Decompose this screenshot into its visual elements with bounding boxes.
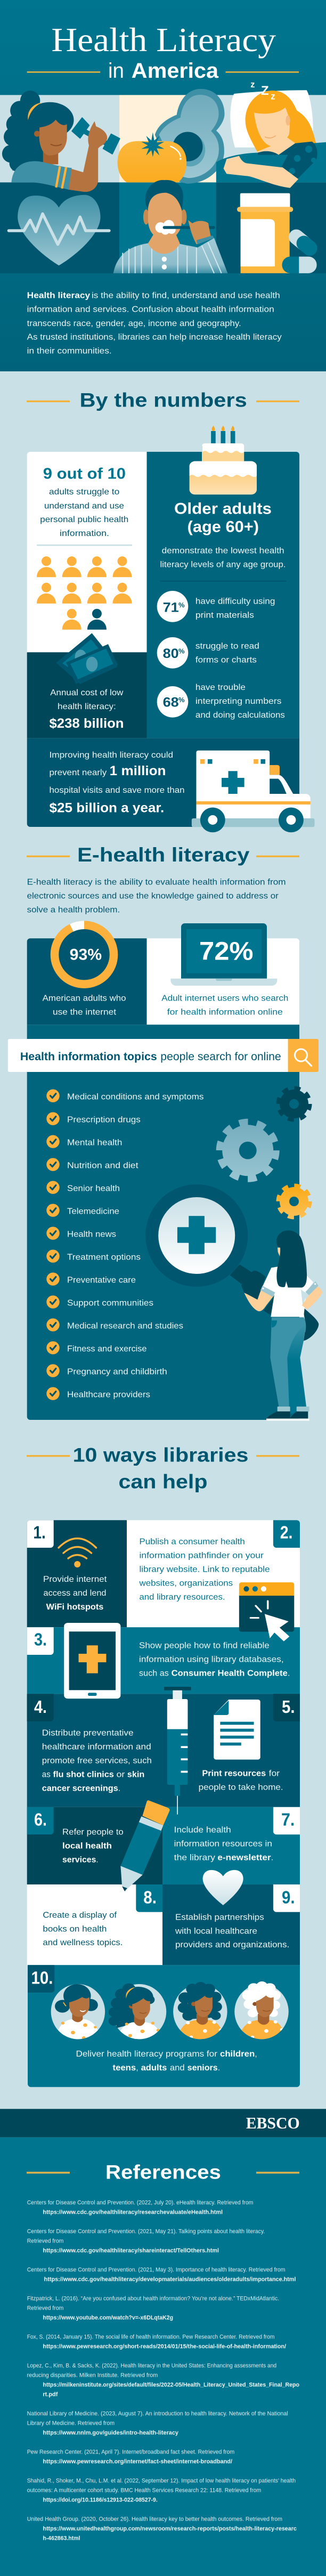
panel: way 2: Publish a consumer health [140, 1537, 245, 1546]
text: reference list: https://www.nnlm.gov/guides/intro-health-literacy [43, 2430, 178, 2436]
icon: pill bottle [237, 193, 317, 273]
panel: way 10: . [218, 2063, 220, 2073]
portrait: teen [109, 1984, 166, 2042]
panel: way 10: Deliver health literacy programs for [76, 2050, 218, 2059]
panel: way 10: , [255, 2050, 257, 2059]
icon: heart [203, 1870, 243, 1905]
stat: 9 out of 10: personal public health [40, 515, 128, 524]
list: health information topics: Support communities [67, 1299, 153, 1308]
text: reference list: https://doi.org/10.1186/s12913-022-08527-9. [43, 2497, 158, 2504]
stat: 68 percent: and doing calculations [195, 711, 285, 720]
heading: references: References [105, 2161, 221, 2183]
panel: way 10: teens [113, 2063, 136, 2073]
heading: e-health literacy [27, 844, 299, 866]
icon: man brushing teeth [113, 180, 227, 273]
panel: way 4: 4. [34, 1697, 47, 1717]
panel: way 10: seniors [188, 2063, 218, 2073]
panel: way 8: books on health [43, 1924, 107, 1933]
panel: way 5: for [269, 1769, 280, 1778]
title: America [132, 59, 219, 83]
icon: avocado [155, 89, 225, 184]
title: in [108, 59, 124, 83]
stat: annual cost: health literacy: [58, 702, 116, 711]
panel: way 2: library website. Link to reputable [140, 1565, 270, 1574]
portrait: child [51, 1984, 105, 2042]
icon: heart with pulse [9, 195, 109, 265]
icon: sleeping woman: z [271, 91, 275, 102]
text: reference list: h-462863.html [43, 2536, 80, 2542]
intro paragraph: is the ability to find, understand and use health [92, 291, 280, 300]
panel: way 1: 1. [33, 1523, 46, 1542]
stat: 9 out of 10: information. [60, 529, 109, 538]
stat: 71 percent: print materials [195, 611, 254, 620]
stat: 9 out of 10 [37, 465, 132, 546]
list: health information topics: Treatment options [67, 1253, 141, 1262]
search bar: Health information topics [20, 1051, 157, 1063]
callout: improving health literacy: 1 million [110, 763, 166, 778]
stat: older adults: demonstrate the lowest health [162, 546, 284, 555]
panel: way 6 [27, 1807, 162, 1884]
icon: dark gear [279, 1088, 309, 1119]
list: health information topics: Medical conditions and symptoms [67, 1093, 203, 1102]
stat: older adults [160, 500, 287, 582]
stat: 68 percent [157, 683, 285, 720]
portrait: senior [234, 1981, 289, 2042]
title [27, 21, 299, 83]
panel: way 9: with local healthcare [175, 1927, 257, 1936]
stat: annual cost [49, 688, 124, 731]
panel: way 8: and wellness topics. [43, 1938, 123, 1947]
intro paragraph: As trusted institutions, libraries can help increase health literacy [27, 332, 282, 342]
text: reference list: https://www.cdc.gov/healthliteracy/researchevaluate/eHealth.html [43, 2209, 223, 2216]
icon: magnifying glass with cross [145, 1184, 248, 1287]
stat: 71 percent: % [178, 601, 185, 609]
callout: improving health literacy [49, 751, 184, 815]
panel: way 8: 8. [143, 1888, 157, 1907]
icon: light gear [221, 1123, 275, 1177]
panel: way 1: WiFi hotspots [46, 1603, 103, 1612]
icon: tomato [118, 132, 186, 182]
stat: 71 percent: 71 [163, 600, 179, 615]
stat: annual cost: Annual cost of low [50, 688, 124, 697]
panel: way 4: . [118, 1784, 120, 1793]
stat: 9 out of 10: adults struggle to [49, 487, 119, 497]
chart: 72 percent laptop [161, 923, 288, 1017]
stat: 80 percent: forms or charts [195, 656, 257, 665]
panel: way 3: 3. [34, 1629, 47, 1649]
list: health information topics: Nutrition and diet [67, 1161, 138, 1171]
hero illustration [0, 80, 326, 273]
text: reference list: https://milkeninstitute.org/sites/default/files/2022-05/Health_Literacy_United_States_Final_Repo [43, 2382, 300, 2388]
text: reference list: Centers for Disease Control and Prevention. (2021, May 3). Importance of health literacy. Retrieved from [27, 2267, 286, 2273]
panel: way 3 [27, 1627, 300, 1694]
panel: way 4: skin [127, 1770, 144, 1779]
text: reference list: Lopez, C., Kim, B. & Sacks, K. (2022). Health literacy in the United States: Enhancing assessments and [27, 2363, 276, 2369]
panel: way 4: or [117, 1770, 125, 1779]
heading: by the numbers: By the numbers [80, 389, 247, 411]
text: reference list: Retrieved from [27, 2238, 64, 2245]
stat: 71 percent [157, 591, 275, 622]
text: reference list: National Library of Medicine. (2023, August 7). An introduction to health literacy. Network of the National [27, 2411, 288, 2417]
stat: older adults: (age 60+) [188, 518, 259, 535]
footer band: EBSCO [246, 2114, 300, 2132]
stat: 68 percent: % [178, 696, 185, 704]
list: health information topics: Medical research and studies [67, 1322, 183, 1331]
intro paragraph: information and services. Confusion about health information [27, 305, 274, 314]
chart: 72 percent laptop: Adult internet users who search [161, 994, 288, 1003]
callout: improving health literacy: prevent nearly [49, 768, 107, 777]
chart: 93 percent ring [43, 925, 126, 1017]
panel: way 5: people to take home. [199, 1783, 283, 1792]
chart: 93 percent ring: American adults who [43, 994, 126, 1003]
stat: older adults: literacy levels of any age group. [160, 560, 286, 569]
icon: birthday cake [190, 426, 257, 494]
intro paragraph: transcends race, gender, age, income and geography. [27, 319, 241, 328]
panel: way 10: , [136, 2063, 138, 2073]
list: health information topics: Health news [67, 1230, 116, 1239]
panel: way 10: adults [141, 2063, 167, 2073]
text: reference list [27, 2200, 300, 2542]
panel: references [0, 2138, 326, 2576]
text: reference list: Fox, S. (2014, January 15). The social life of health information. Pew Research Center. Retrieved from [27, 2334, 275, 2341]
list: health information topics: Prescription drugs [67, 1116, 141, 1125]
panel: way 3: Consumer Health Complete [172, 1669, 288, 1678]
intro paragraph: in their communities. [27, 346, 112, 355]
panel: way 10: 10. [31, 1968, 53, 1987]
panel: way 3: information using library databases, [139, 1655, 284, 1664]
icon: sleeping woman: z [250, 80, 255, 90]
stat: 80 percent: 80 [163, 646, 179, 661]
chart: 93 percent ring: use the internet [53, 1007, 117, 1017]
heading: references [27, 2161, 299, 2183]
text: reference list: https://www.cdc.gov/healthliteracy/developmaterials/audiences/olderadults/importance.html [44, 2277, 296, 2283]
callout: improving health literacy: $25 billion a year. [49, 800, 164, 815]
header band [0, 0, 326, 371]
text: reference list: Shahid, R., Shoker, M., Chu, L.M. et al. (2022, September 12). Impact of low health literacy on patients’ health [27, 2478, 296, 2484]
icon: window with cursor [239, 1582, 294, 1642]
panel: way 4: promote free services, such [42, 1757, 152, 1766]
panel: way 9: Establish partnerships [175, 1913, 264, 1922]
portrait: adult [173, 1982, 227, 2042]
panel: way 3: such as [139, 1669, 169, 1678]
list: health information topics: Telemedicine [67, 1207, 119, 1216]
text: reference list: Centers for Disease Control and Prevention. (2022, July 20). eHealth literacy. Retrieved from [27, 2200, 254, 2206]
stat: 9 out of 10: understand and use [44, 501, 124, 510]
panel: way 4: Distribute preventative [42, 1729, 134, 1738]
panel: way 7: . [271, 1853, 273, 1862]
panel: way 8: Create a display of [43, 1911, 117, 1920]
panel: way 6: Refer people to [62, 1827, 124, 1836]
panel: way 6: local health [62, 1841, 112, 1850]
panel: way 9: 9. [282, 1888, 295, 1907]
chart: 93 percent ring: 93% [70, 946, 102, 964]
panel: way 3: . [288, 1669, 290, 1678]
icon: four portraits [51, 1981, 289, 2042]
list: health information topics [46, 1089, 203, 1400]
panel: way 9 [162, 1884, 300, 1965]
panel: way 8 [27, 1884, 162, 1965]
stat: 80 percent: struggle to read [195, 642, 259, 651]
panel: way 2 [127, 1520, 300, 1627]
panel: way 7: 7. [281, 1810, 295, 1830]
list: health information topics: Senior health [67, 1184, 120, 1193]
footer band [0, 2109, 326, 2138]
heading: 10 ways libraries can help: can help [118, 1470, 208, 1492]
panel: way 5: 5. [282, 1697, 295, 1717]
panel: way 6: . [96, 1855, 98, 1864]
callout: improving health literacy: Improving health literacy could [49, 751, 173, 760]
icon: ambulance [192, 751, 315, 832]
search bar [8, 1039, 319, 1072]
panel: way 7: information resources in [174, 1839, 272, 1848]
stat: 68 percent: have trouble [195, 683, 246, 692]
text: e-health definition: electronic sources and use the knowledge gained to address or [27, 892, 279, 901]
icon: sleeping woman: Z [261, 84, 269, 98]
heading: 10 ways libraries can help [27, 1444, 299, 1492]
stat: annual cost: $238 billion [49, 716, 124, 731]
panel: way 4: flu shot clinics [53, 1770, 114, 1779]
icon: document [214, 1700, 260, 1760]
list: health information topics: Fitness and exercise [67, 1345, 147, 1354]
heading: 10 ways libraries can help: 10 ways libraries [73, 1444, 248, 1466]
intro paragraph: Health literacy [27, 291, 90, 300]
icon: syringe [164, 1687, 191, 1815]
text: reference list: https://www.cdc.gov/healthliteracy/shareinteract/TellOthers.html [43, 2248, 219, 2254]
list: health information topics: Preventative care [67, 1276, 136, 1285]
icon: woman with magnifier [230, 1230, 322, 1421]
stat: older adults: Older adults [174, 500, 272, 517]
text: e-health definition: solve a health problem. [27, 906, 120, 915]
text: e-health definition [27, 878, 286, 915]
text: reference list: Pew Research Center. (2021, April 7). Internet/broadband fact sheet. Retrieved from [27, 2449, 234, 2456]
title: Health Literacy [51, 21, 276, 59]
list: health information topics: Mental health [67, 1139, 122, 1148]
panel: e-health literacy [8, 923, 322, 1421]
text: reference list: reducing disparities. Milken Institute. Retrieved from [27, 2372, 158, 2379]
icon: wifi [59, 1539, 96, 1567]
panel: by the numbers [27, 426, 315, 832]
panel: way 3: Show people how to find reliable [139, 1641, 270, 1650]
icon: orange gear [279, 1186, 309, 1217]
stat: 80 percent [157, 637, 259, 669]
panel: way 7: Include health [174, 1825, 231, 1834]
list: health information topics: Healthcare providers [67, 1391, 150, 1400]
panel: way 1 [27, 1520, 127, 1627]
panel: way 10: and [170, 2063, 185, 2073]
list: health information topics: Pregnancy and childbirth [67, 1368, 167, 1377]
stat: 68 percent: interpreting numbers [195, 697, 281, 706]
panel: way 4: as [42, 1770, 51, 1779]
stat: 9 out of 10: 9 out of 10 [43, 465, 126, 482]
text: reference list: rt.pdf [43, 2392, 58, 2398]
stat: 71 percent: have difficulty using [195, 597, 275, 606]
stat: 68 percent: 68 [163, 695, 179, 710]
icon: ten people [37, 556, 132, 630]
chart: 72 percent laptop: for health information online [167, 1007, 283, 1017]
text: reference list: Library of Medicine. Retrieved from [27, 2420, 115, 2427]
text: e-health definition: E-health literacy is the ability to evaluate health information from [27, 878, 286, 887]
icon: pencil [120, 1800, 170, 1891]
panel: way 7 [162, 1807, 300, 1884]
intro paragraph [27, 291, 282, 355]
panel: way 5 [199, 1694, 300, 1792]
panel: way 4: cancer screenings [42, 1784, 118, 1793]
panel: way 2: and library resources. [140, 1592, 225, 1602]
text: reference list: outcomes: A multicenter cohort study. BMC Health Services Research 22: 1148. Retrieved from [27, 2488, 261, 2494]
panel: way 10: children [220, 2050, 255, 2059]
stat: 80 percent: % [178, 647, 185, 655]
text: reference list: Retrieved from [27, 2305, 64, 2312]
panel: way 9: providers and organizations. [175, 1940, 289, 1949]
icon: tablet with cross [64, 1623, 120, 1699]
text: reference list: United Health Group. (2020, October 26). Health literacy key to better health outcomes. Retrieved from [27, 2516, 282, 2523]
text: reference list: Fitzpatrick, L. (2016). “Are you confused about health information? You’re not alone.” TEDxMidAtlantic. [27, 2296, 279, 2302]
panel: way 7: the library [174, 1853, 215, 1862]
panel: way 5: Print resources [202, 1769, 266, 1778]
text: reference list: https://www.youtube.com/watch?v=-x6DLqtaK2g [43, 2315, 173, 2321]
icon: money [56, 633, 118, 684]
callout: improving health literacy: hospital visits and save more than [49, 786, 184, 795]
search bar: people search for online [160, 1051, 281, 1063]
heading: by the numbers [27, 389, 299, 411]
text: reference list: Centers for Disease Control and Prevention. (2021, May 21). Talking points about health literacy. [27, 2229, 265, 2235]
panel: way 6: services [62, 1855, 96, 1864]
panel: way 4: healthcare information and [42, 1743, 151, 1752]
icon: sleeping woman [216, 80, 326, 188]
text: reference list: https://www.pewresearch.org/short-reads/2014/01/15/the-social-life-of-health-information/ [43, 2344, 286, 2350]
panel: way 6: 6. [34, 1810, 47, 1830]
panel: way 4 [27, 1694, 300, 1807]
panel: way 2: websites, organizations [138, 1579, 233, 1588]
panel: way 1: access and lend [44, 1589, 107, 1598]
text: reference list: https://www.unitedhealthgroup.com/newsroom/research-reports/posts/health-literacy-researc [43, 2526, 297, 2532]
heading: e-health literacy: E-health literacy [77, 844, 250, 866]
panel: way 1: Provide internet [43, 1575, 107, 1584]
panel: way 2: information pathfinder on your [140, 1551, 264, 1560]
icon: woman lifting dumbbell [2, 91, 119, 192]
panel: way 2: 2. [280, 1523, 293, 1542]
text: reference list: https://www.pewresearch.org/internet/fact-sheet/internet-broadband/ [43, 2459, 232, 2465]
chart: 72 percent laptop: 72% [199, 938, 254, 966]
panel: way 10 [28, 1965, 300, 2087]
panel: way 7: e-newsletter [217, 1853, 271, 1862]
